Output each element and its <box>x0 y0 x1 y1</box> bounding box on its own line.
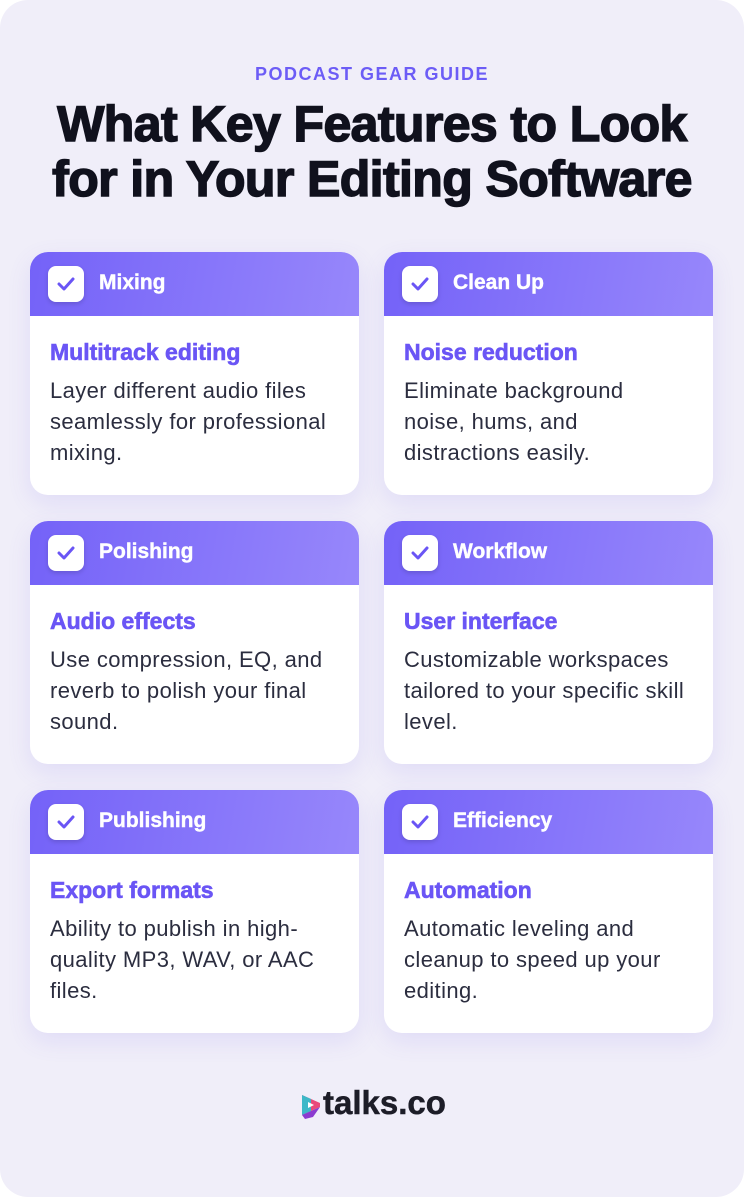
card: polishing: reverb to polish your final <box>50 678 307 703</box>
card: efficiency: cleanup to speed up your <box>404 947 661 972</box>
card: mixing: mixing. <box>50 440 122 465</box>
card: clean up <box>384 252 713 495</box>
card: clean up: noise, hums, and <box>404 409 578 434</box>
card: publishing: quality MP3, WAV, or AAC <box>50 947 314 972</box>
card: workflow <box>384 521 713 764</box>
card: publishing: files. <box>50 978 98 1003</box>
card: clean up: Eliminate background <box>404 378 624 403</box>
card: mixing: Layer different audio files <box>50 378 306 403</box>
title <box>52 96 692 208</box>
card: publishing: Export formats <box>50 877 214 903</box>
card: publishing <box>30 790 359 1033</box>
card: polishing: Audio effects <box>50 608 196 634</box>
card: clean up: Clean Up <box>453 271 544 294</box>
card: efficiency: Efficiency <box>453 809 552 832</box>
card: polishing <box>30 521 359 764</box>
card: mixing: seamlessly for professional <box>50 409 326 434</box>
card: workflow: tailored to your specific skill <box>404 678 684 703</box>
card: publishing: Publishing <box>99 809 206 832</box>
title: What Key Features to Look <box>57 96 687 152</box>
card: polishing: Polishing <box>99 540 194 563</box>
card: polishing: Use compression, EQ, and <box>50 647 322 672</box>
card: efficiency: Automation <box>404 877 532 903</box>
logo: talks.co: talks.co <box>323 1084 446 1121</box>
card: polishing: sound. <box>50 709 118 734</box>
card: clean up: distractions easily. <box>404 440 590 465</box>
card: publishing: Ability to publish in high- <box>50 916 298 941</box>
card: efficiency: Automatic leveling and <box>404 916 634 941</box>
card: mixing <box>30 252 359 495</box>
card: clean up: Noise reduction <box>404 339 578 365</box>
card: mixing: Mixing <box>99 271 166 294</box>
kicker: PODCAST GEAR GUIDE <box>255 64 489 84</box>
card: workflow: User interface <box>404 608 557 634</box>
card: mixing: Multitrack editing <box>50 339 240 365</box>
card: workflow: level. <box>404 709 458 734</box>
card: workflow: Workflow <box>453 540 547 563</box>
card: workflow: Customizable workspaces <box>404 647 669 672</box>
card: efficiency: editing. <box>404 978 478 1003</box>
card: efficiency <box>384 790 713 1033</box>
title: for in Your Editing Software <box>52 151 692 207</box>
